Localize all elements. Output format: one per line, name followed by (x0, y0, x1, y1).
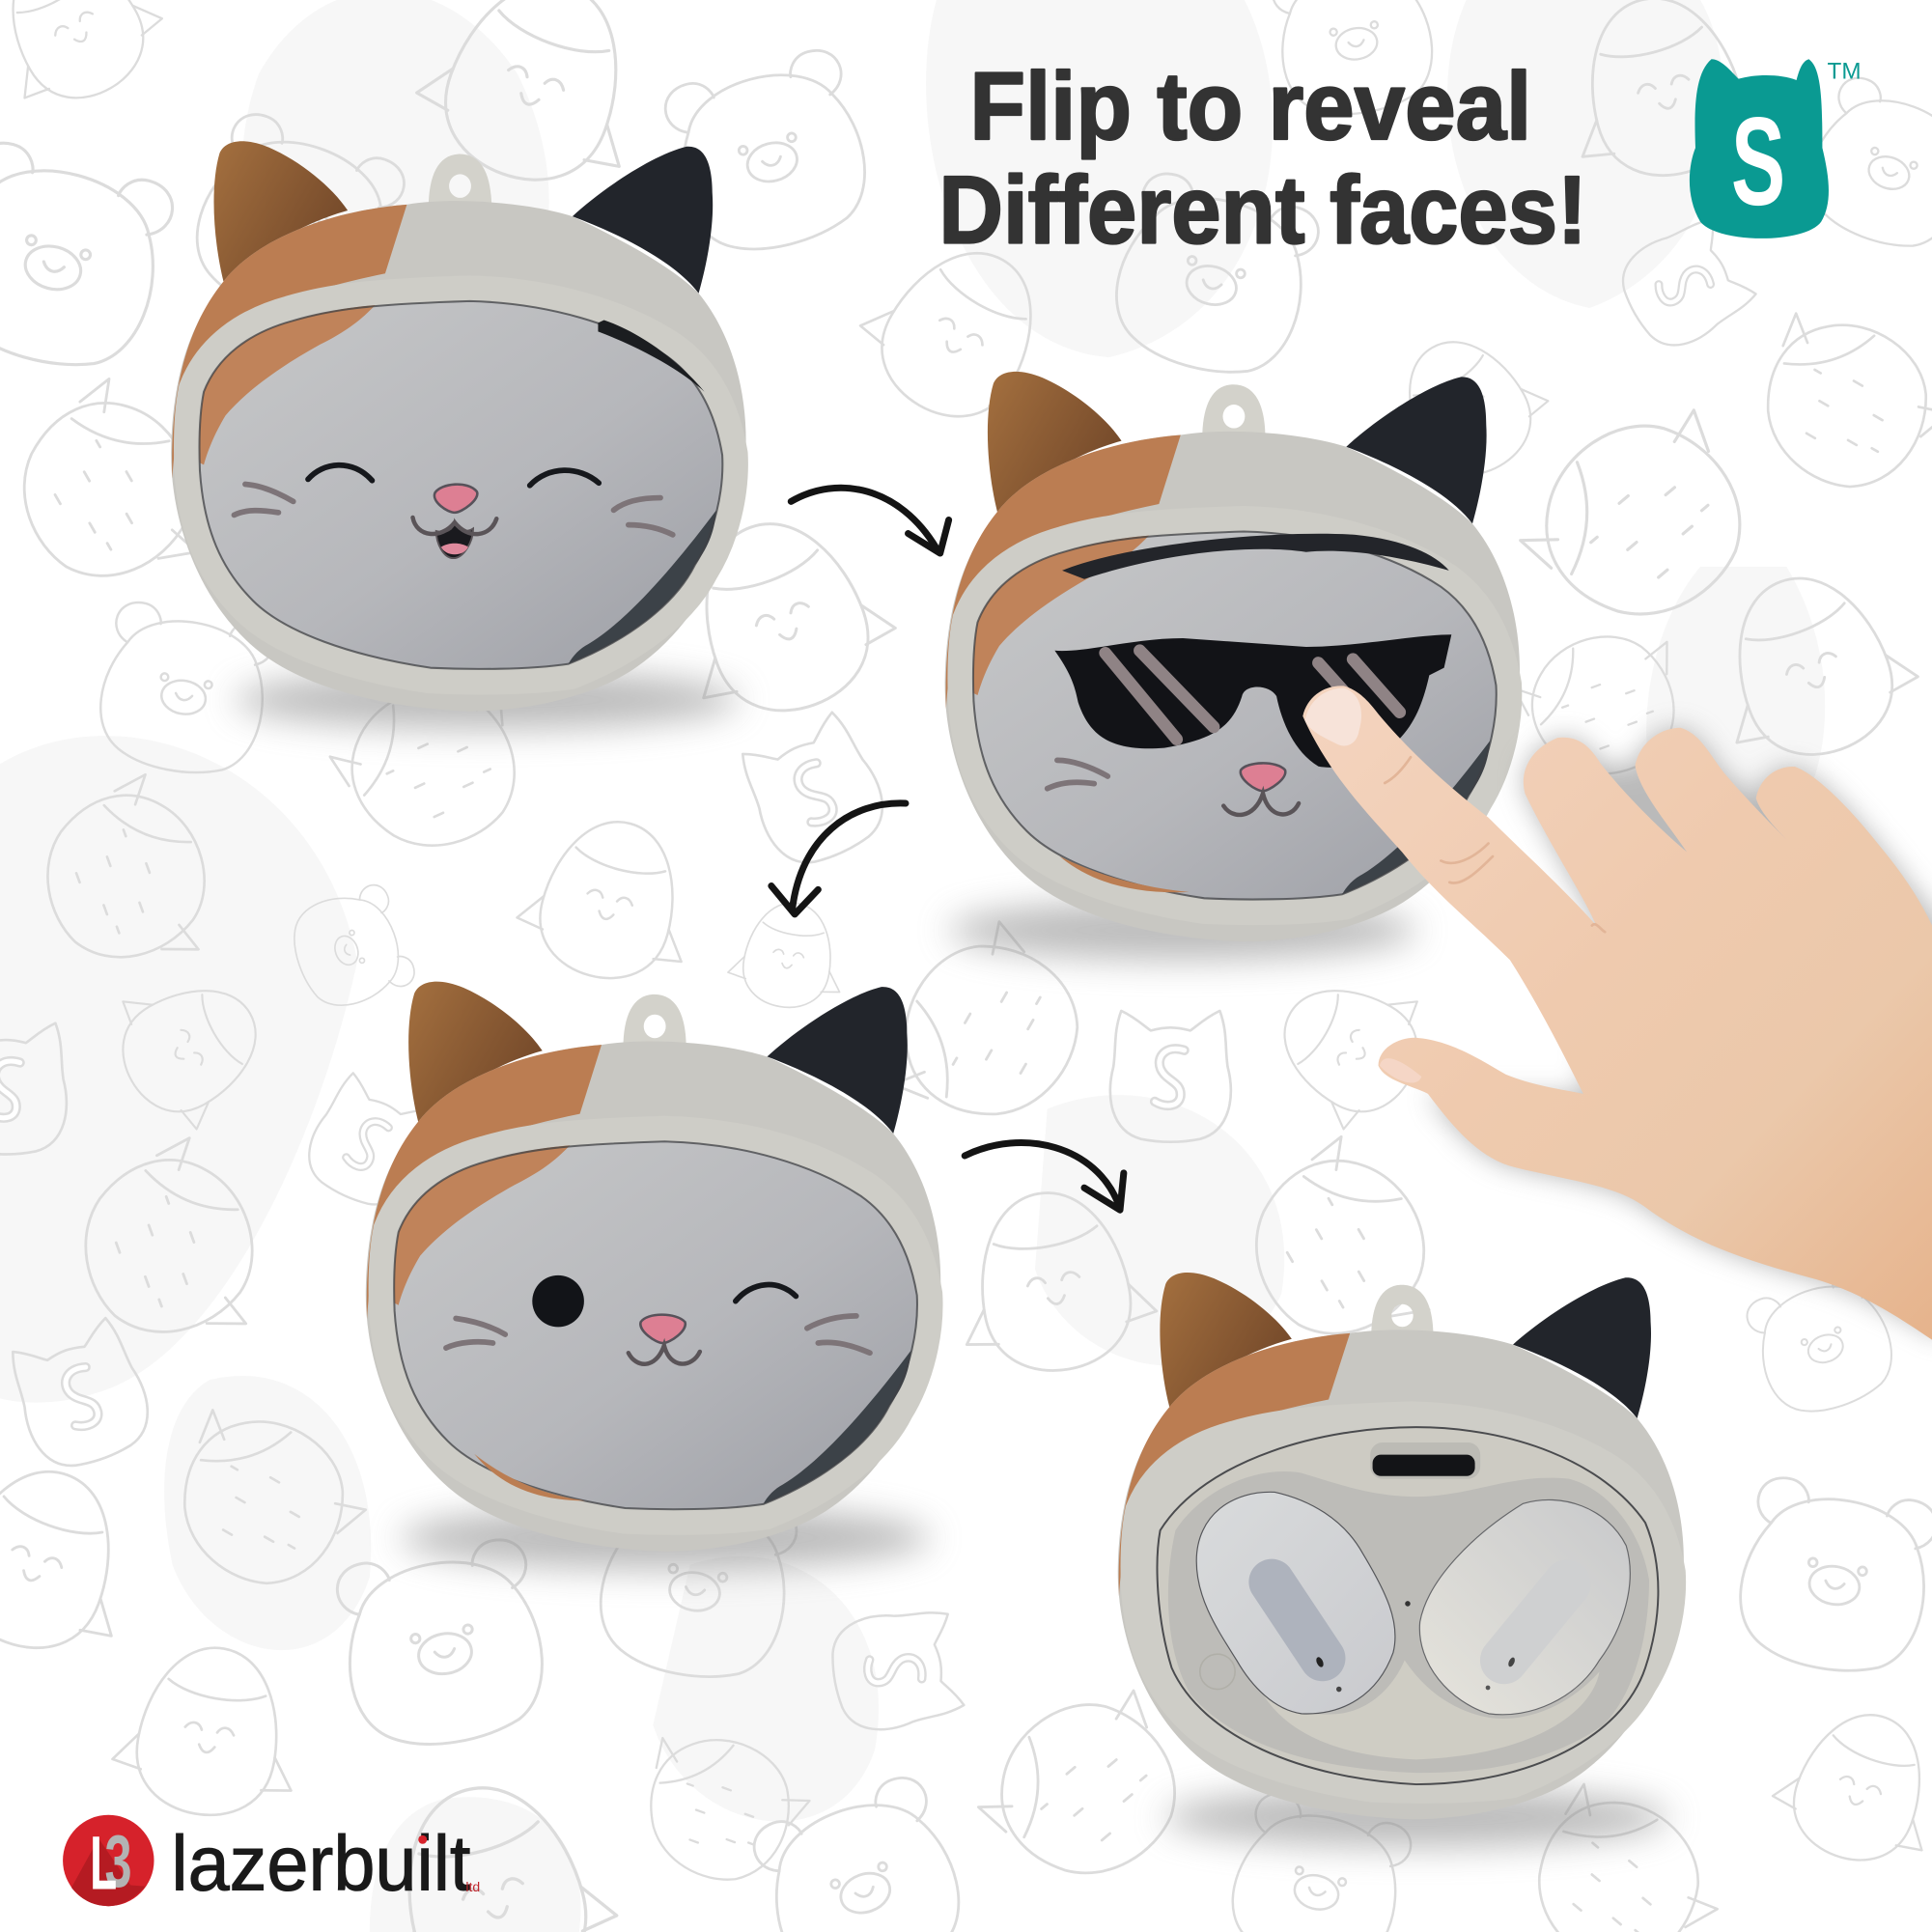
Squishmallows S logo (1690, 59, 1862, 238)
thumb nail (1380, 1058, 1421, 1083)
arrow: case 2 to case 3 (771, 803, 906, 914)
earbud case 2: sunglasses face (945, 372, 1520, 941)
cat 4 shadow (1164, 1788, 1669, 1847)
hand shadow (1428, 728, 1932, 1340)
right earbud (1419, 1499, 1630, 1715)
arrow: case 3 to case 4 (965, 1143, 1124, 1210)
left earbud (1196, 1492, 1395, 1714)
dark gap above lid (1062, 534, 1449, 579)
cat 2 shadow (949, 901, 1417, 960)
Squishmallows S logo: S (1731, 91, 1785, 232)
logo badge (63, 1815, 154, 1906)
arrow: case 1 to case 2 (791, 488, 949, 553)
nose and mouth (1241, 763, 1285, 791)
logo badge: 3 (104, 1821, 132, 1903)
nose and mouth (640, 1315, 686, 1343)
sunglass shine (1106, 651, 1400, 740)
L marking (1200, 1654, 1235, 1690)
USB-C port (1370, 1442, 1480, 1479)
Squishmallows S logo: TM (1828, 59, 1862, 85)
winking eye (736, 1285, 796, 1302)
hand pointing at case (1302, 686, 1932, 1340)
earbud case 1: smiling face (171, 141, 746, 712)
finger joints (1385, 757, 1605, 932)
Lazerbuilt logo: ltd (465, 1879, 480, 1894)
title: Flip to reveal (969, 53, 1531, 160)
Lazerbuilt logo (63, 1815, 480, 1908)
lower orange sliver (474, 1454, 585, 1500)
whiskers (1048, 760, 1107, 789)
cat 1 shadow (234, 670, 740, 729)
title: Different faces! (938, 156, 1587, 264)
lower well highlights (1252, 1660, 1600, 1759)
fingernail (1305, 688, 1361, 745)
earbud case 4: open with earbuds (1118, 1273, 1684, 1819)
pink nose (434, 485, 477, 513)
tray inner well (1168, 1471, 1649, 1773)
open eye (532, 1275, 584, 1327)
lower orange sliver (1059, 856, 1189, 892)
logo badge: L (90, 1819, 117, 1905)
cat 3 shadow (401, 1505, 930, 1570)
whiskers (446, 1316, 870, 1353)
wordmark: lazerbuilt (171, 1821, 470, 1908)
open mouth (436, 521, 473, 558)
earbud case 3: winking face (366, 982, 940, 1552)
sunglasses (1054, 634, 1451, 768)
whiskers (234, 485, 673, 535)
title (938, 53, 1587, 264)
open tray (1158, 1427, 1658, 1784)
smiling eyes (308, 465, 599, 486)
